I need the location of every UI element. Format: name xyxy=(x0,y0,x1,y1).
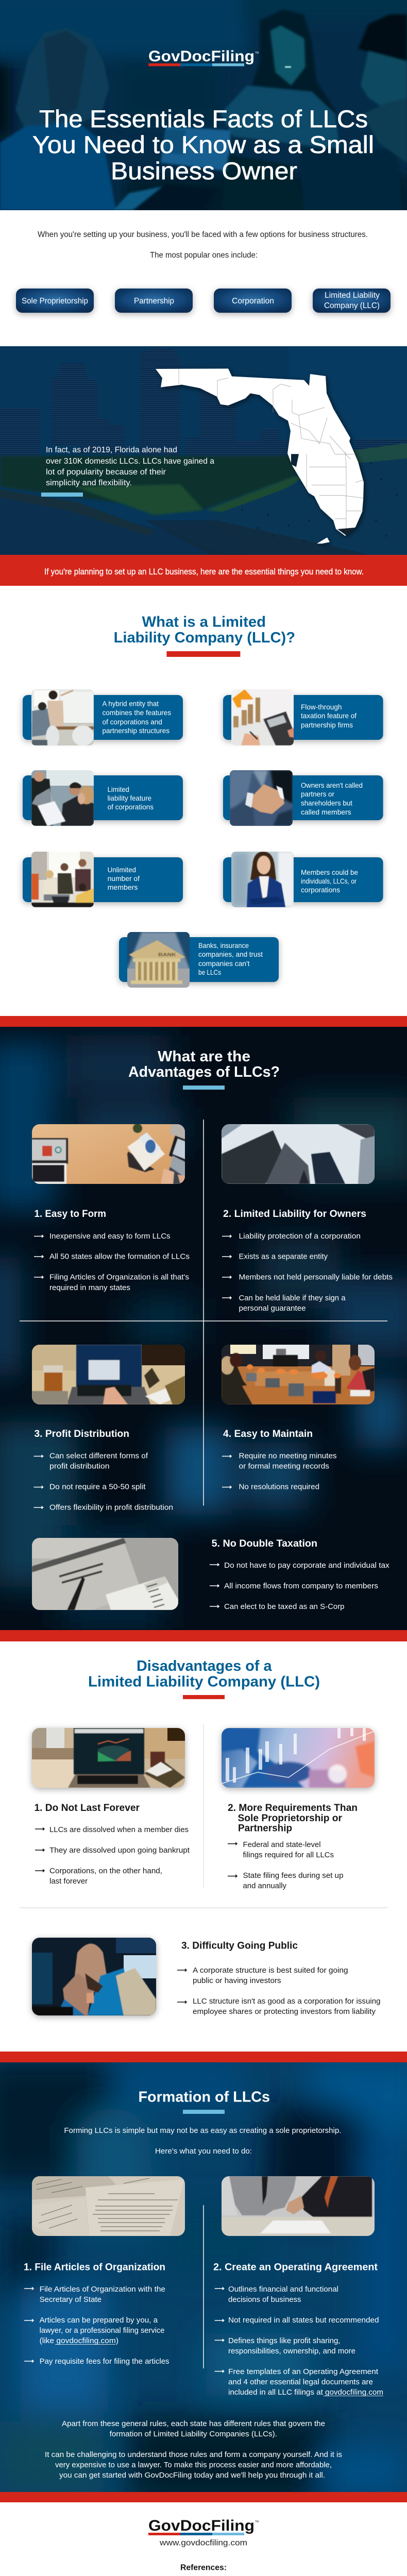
photo: handshake xyxy=(230,770,293,826)
heading: 3. Profit Distribution xyxy=(34,1429,129,1439)
intro text: Forming LLCs is simple but may not be as easy as creating a sole proprietorship. xyxy=(64,2126,341,2135)
logo: GovDocFiling xyxy=(148,48,255,65)
caption: Flow-through xyxy=(301,703,342,711)
statistic text xyxy=(46,446,214,487)
bullet: included in all LLC filings at govdocfiling.com xyxy=(228,2388,383,2397)
step 2: operating agreement xyxy=(213,2176,383,2397)
pill: partnership: Partnership xyxy=(134,297,174,306)
panel: Florida statistic xyxy=(0,346,407,586)
caption: combines the features xyxy=(102,708,171,717)
bullet list xyxy=(228,1840,343,1890)
photo: tax statement xyxy=(32,1538,178,1610)
caption xyxy=(198,941,263,976)
bullet: personal guarantee xyxy=(239,1304,306,1313)
references heading: References: xyxy=(180,2564,227,2572)
footer logo: TM xyxy=(255,2520,259,2523)
bullet xyxy=(34,1273,189,1292)
heading: 1. Easy to Form xyxy=(34,1209,106,1219)
caption xyxy=(301,703,357,729)
heading: 2. Limited Liability for Owners xyxy=(223,1209,366,1219)
bullet: A corporate structure is best suited for going xyxy=(193,1966,348,1975)
logo: TM xyxy=(255,52,259,55)
photo: document handover xyxy=(31,770,94,826)
bullet list xyxy=(24,2285,169,2366)
title xyxy=(32,105,374,184)
photo: group of people xyxy=(31,852,94,907)
photo: finance graphic xyxy=(222,1728,375,1788)
heading: What are the xyxy=(158,1048,250,1065)
intro text xyxy=(38,230,368,260)
panel: hero xyxy=(0,0,407,222)
red underline xyxy=(183,1695,225,1699)
bullet: All 50 states allow the formation of LLCs xyxy=(49,1252,190,1261)
bullet xyxy=(215,2336,355,2355)
bullet: and annually xyxy=(243,1882,286,1890)
caption xyxy=(102,700,171,735)
card: flow-through taxation xyxy=(223,689,383,745)
heading: Disadvantages of a xyxy=(137,1658,272,1674)
title: You Need to Know as a Small xyxy=(32,131,374,158)
bullet xyxy=(228,1840,334,1859)
bullet: They are dissolved upon going bankrupt xyxy=(49,1846,190,1855)
bullet xyxy=(24,2285,165,2304)
heading: 3. Difficulty Going Public xyxy=(181,1941,298,1952)
closing text: Apart from these general rules, each state has different rules that govern the xyxy=(62,2419,325,2428)
advantage 5: no double taxation xyxy=(32,1538,389,1611)
bullet: Inexpensive and easy to form LLCs xyxy=(49,1232,170,1241)
pill: partnership xyxy=(115,289,193,313)
pill: limited liability company xyxy=(313,289,391,313)
pill: corporation xyxy=(214,289,292,313)
pill: limited liability company: Limited Liability xyxy=(325,291,380,300)
bullet xyxy=(35,1867,162,1886)
intro text xyxy=(64,2126,341,2156)
bullet: Require no meeting minutes xyxy=(239,1452,337,1461)
heading xyxy=(228,1803,358,1834)
caption: partnership firms xyxy=(301,721,353,729)
advantage 4: easy to maintain xyxy=(221,1345,375,1492)
caption: companies can't xyxy=(198,959,250,968)
pill: sole proprietorship xyxy=(16,289,94,313)
bullet: (like govdocfiling.com) xyxy=(40,2336,118,2345)
bullet: Corporations, on the other hand, xyxy=(49,1867,162,1875)
bullet: required in many states xyxy=(49,1283,130,1292)
bullet: Articles can be prepared by you, a xyxy=(40,2316,158,2325)
statistic text: over 310K domestic LLCs. LLCs have gained a xyxy=(46,457,214,466)
bullet xyxy=(24,2316,164,2345)
photo: signing handshake xyxy=(222,2176,375,2236)
caption: Unlimited xyxy=(108,866,136,874)
caption: A hybrid entity that xyxy=(102,700,159,708)
bullet: LLCs are dissolved when a member dies xyxy=(49,1825,189,1834)
bullet: or formal meeting records xyxy=(239,1462,329,1471)
red band xyxy=(0,2052,407,2063)
bullet: Not required in all states but recommended xyxy=(228,2316,379,2325)
bullet: Do not have to pay corporate and individual tax xyxy=(224,1561,389,1570)
bullet: employee shares or protecting investors from liability xyxy=(193,2007,376,2016)
panel: disadvantages xyxy=(20,1658,387,2016)
step 1: file articles xyxy=(24,2176,185,2366)
bullet xyxy=(34,1452,148,1471)
caption: number of xyxy=(108,874,140,883)
bullet xyxy=(177,1997,380,2016)
caption xyxy=(301,781,363,816)
accent bar xyxy=(183,1086,225,1090)
card: owners called members xyxy=(223,770,383,826)
bullet: Can elect to be taxed as an S-Corp xyxy=(224,1602,344,1611)
caption xyxy=(108,785,154,811)
bullet: Free templates of an Operating Agreement xyxy=(228,2367,379,2376)
disadvantage 3: difficulty going public xyxy=(32,1938,380,2016)
bullet xyxy=(215,2285,338,2304)
pill: limited liability company: Company (LLC) xyxy=(324,301,380,310)
bullet: Outlines financial and functional xyxy=(228,2285,338,2294)
closing text xyxy=(45,2419,342,2480)
bullet list xyxy=(222,1232,393,1313)
heading xyxy=(88,1658,320,1690)
bullet: and 4 other essential legal documents are xyxy=(228,2378,373,2386)
advantage 1: easy to form xyxy=(32,1124,204,1292)
bullet: Federal and state-level xyxy=(243,1840,320,1849)
skyline photo background xyxy=(0,346,407,555)
intro text: Here's what you need to do: xyxy=(155,2147,252,2156)
accent bar xyxy=(41,493,83,497)
heading: 2. More Requirements Than xyxy=(228,1803,358,1814)
card: unlimited members xyxy=(23,852,183,907)
bullet: filings required for all LLCs xyxy=(243,1851,334,1859)
closing text: very expensive to use a lawyer. To make this process easier and more affordable, xyxy=(55,2461,332,2469)
heading: Advantages of LLCs? xyxy=(128,1064,280,1080)
caption xyxy=(301,868,358,894)
panel: advantages xyxy=(0,1016,407,1641)
bullet: Secretary of State xyxy=(40,2295,101,2304)
bullet: Can select different forms of xyxy=(49,1452,148,1461)
photo: bank building: BANK xyxy=(158,952,177,957)
card: hybrid entity xyxy=(23,689,183,748)
bullet xyxy=(222,1294,346,1313)
caption: of corporations and xyxy=(102,718,162,726)
photo: businesswoman xyxy=(231,852,294,907)
title: The Essentials Facts of LLCs xyxy=(39,105,368,132)
bullet: Defines things like profit sharing, xyxy=(228,2336,340,2345)
photo: laptop and drink xyxy=(32,1345,185,1404)
heading: 4. Easy to Maintain xyxy=(223,1429,313,1439)
caption: members xyxy=(108,883,138,891)
red underline xyxy=(166,651,240,657)
website: www.govdocfiling.com xyxy=(159,2539,247,2547)
bullet list xyxy=(34,1232,190,1292)
statistic text: In fact, as of 2019, Florida alone had xyxy=(46,446,177,454)
hero photo background xyxy=(0,0,407,222)
red band xyxy=(0,1016,407,1027)
panel: what is an LLC xyxy=(23,614,383,988)
card: member types xyxy=(223,852,383,907)
heading: Limited Liability Company (LLC) xyxy=(88,1673,320,1690)
photo: stressed trader xyxy=(32,1938,156,2015)
bullet: State filing fees during set up xyxy=(243,1871,343,1880)
caption: Banks, insurance xyxy=(198,941,249,950)
caption: companies, and trust xyxy=(198,950,263,958)
heading: Sole Proprietorship or xyxy=(238,1813,343,1824)
bullet: Liability protection of a corporation xyxy=(239,1232,361,1241)
red band xyxy=(0,1630,407,1641)
photo: trading laptop xyxy=(32,1728,185,1788)
pill: sole proprietorship: Sole Proprietorship xyxy=(22,297,88,306)
bullet: Members not held personally liable for debts xyxy=(239,1273,393,1282)
bullet: No resolutions required xyxy=(239,1483,319,1492)
red callout band: If you're planning to set up an LLC business, here are the essential things you need to know. xyxy=(44,567,364,577)
bullet list xyxy=(210,1561,389,1611)
panel: formation of LLCs xyxy=(0,2052,407,2504)
bullet list xyxy=(177,1966,380,2016)
bullet: decisions of business xyxy=(228,2295,301,2304)
bullet: Can be held liable if they sign a xyxy=(239,1294,346,1302)
panel: intro xyxy=(16,230,391,313)
caption xyxy=(108,866,140,891)
bullet: profit distribution xyxy=(49,1462,110,1471)
bullet: lawyer, or a professional filing service xyxy=(40,2326,164,2335)
closing text: formation of Limited Liability Companies (LLCs). xyxy=(110,2430,277,2438)
heading: 5. No Double Taxation xyxy=(212,1538,317,1549)
heading: 2. Create an Operating Agreement xyxy=(213,2262,378,2273)
red band xyxy=(0,2492,407,2502)
caption: Members could be xyxy=(301,868,358,876)
heading xyxy=(128,1048,280,1080)
bullet xyxy=(215,2367,383,2397)
caption: Owners aren't called xyxy=(301,781,363,789)
bullet xyxy=(177,1966,348,1985)
heading: 1. File Articles of Organization xyxy=(24,2262,165,2273)
disadvantage 1: do not last forever xyxy=(32,1728,190,1886)
bullet list xyxy=(215,2285,383,2397)
photo: whiteboard meeting xyxy=(31,689,94,748)
intro text: The most popular ones include: xyxy=(150,251,258,260)
caption: of corporations xyxy=(108,803,154,811)
photo: team meeting xyxy=(221,1345,375,1404)
pill: corporation: Corporation xyxy=(232,297,274,306)
card: banks excluded xyxy=(119,932,279,988)
closing text: you can get started with GovDocFiling today and we'll help you through it all. xyxy=(59,2471,325,2480)
heading xyxy=(114,614,295,646)
caption: called members xyxy=(301,808,351,816)
bullet: File Articles of Organization with the xyxy=(40,2285,165,2294)
blurred blue background xyxy=(0,2061,407,2504)
bullet: public or having investors xyxy=(193,1976,281,1985)
heading: 1. Do Not Last Forever xyxy=(34,1803,140,1814)
bullet: Exists as a separate entity xyxy=(239,1252,328,1261)
bullet: Pay requisite fees for filing the articles xyxy=(40,2357,169,2366)
statistic text: simplicity and flexibility. xyxy=(46,479,132,487)
photo: old documents xyxy=(32,2176,185,2236)
red callout band xyxy=(0,555,407,586)
caption: liability feature xyxy=(108,794,151,802)
bullet list xyxy=(35,1825,190,1886)
disadvantage 2: more requirements xyxy=(222,1728,375,1890)
footer logo: GovDocFiling xyxy=(148,2517,255,2534)
caption: be LLCs xyxy=(198,968,221,976)
blurred dark background xyxy=(0,1027,407,1630)
advantage 2: limited liability xyxy=(222,1124,393,1313)
bullet: All income flows from company to members xyxy=(224,1582,378,1590)
title: Business Owner xyxy=(111,157,297,184)
photo: desk with laptops xyxy=(32,1124,204,1184)
caption: partners or xyxy=(301,790,334,798)
intro text: When you're setting up your business, you'll be faced with a few options for business structures. xyxy=(38,230,368,239)
heading: Partnership xyxy=(238,1823,292,1834)
bullet: responsibilities, ownership, and more xyxy=(228,2347,355,2355)
photo: house coins calculator xyxy=(231,689,295,745)
accent bar xyxy=(183,2110,225,2114)
bullet: last forever xyxy=(49,1877,88,1886)
caption: corporations xyxy=(301,886,340,894)
Florida map xyxy=(156,368,364,544)
bullet xyxy=(222,1452,337,1471)
closing text: It can be challenging to understand those rules and form a company yourself. And it is xyxy=(45,2450,342,2459)
caption: shareholders but xyxy=(301,799,352,807)
caption: Limited xyxy=(108,785,129,793)
card: limited liability feature xyxy=(23,770,183,826)
bullet xyxy=(228,1871,343,1890)
photo: skyscrapers xyxy=(222,1124,375,1184)
bullet: Offers flexibility in profit distribution xyxy=(49,1503,173,1512)
heading: Formation of LLCs xyxy=(138,2089,270,2106)
caption: partnership structures xyxy=(102,726,169,735)
statistic text: lot of popularity because of their xyxy=(46,468,166,477)
bullet: LLC structure isn't as good as a corporation for issuing xyxy=(193,1997,380,2006)
photo: bank building xyxy=(127,932,190,988)
bullet list xyxy=(222,1452,337,1492)
bullet: Do not require a 50-50 split xyxy=(49,1483,146,1492)
caption: taxation feature of xyxy=(301,711,357,720)
heading: Liability Company (LLC)? xyxy=(114,630,295,646)
panel: footer xyxy=(87,2517,319,2576)
bullet: Filing Articles of Organization is all that's xyxy=(49,1273,189,1282)
caption: individuals, LLCs, or xyxy=(301,877,357,885)
heading: What is a Limited xyxy=(142,614,266,631)
bullet list xyxy=(34,1452,173,1512)
advantage 3: profit distribution xyxy=(32,1345,185,1512)
